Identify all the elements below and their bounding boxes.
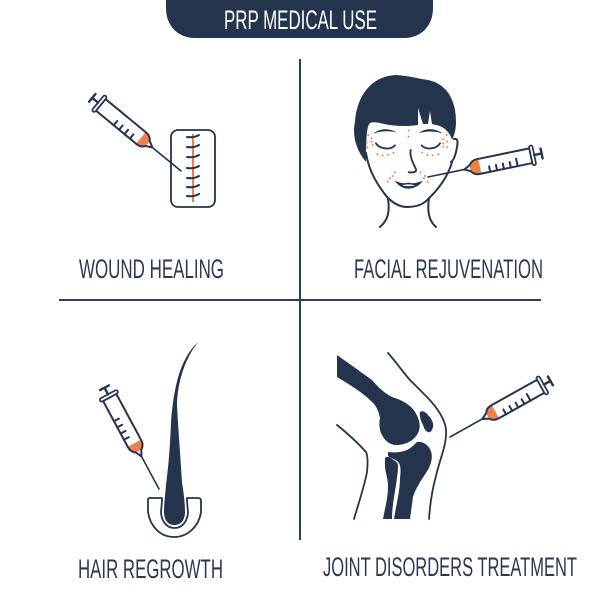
icon: syringe xyxy=(86,90,187,179)
panel: hair regrowth xyxy=(78,342,223,584)
icon: knee joint xyxy=(337,353,446,519)
title: PRP MEDICAL USE xyxy=(224,5,377,35)
quadrant divider lines xyxy=(59,59,541,540)
facial features xyxy=(366,129,448,189)
icon: syringe xyxy=(96,383,168,494)
icon: hair follicle xyxy=(148,342,201,537)
injection point dots xyxy=(366,130,448,183)
panel: wound healing xyxy=(79,90,224,284)
label: wound healing: WOUND HEALING xyxy=(79,254,224,284)
label: hair regrowth: HAIR REGROWTH xyxy=(78,554,223,584)
icon: face xyxy=(354,75,458,227)
header banner xyxy=(166,0,433,38)
icon: syringe xyxy=(426,144,544,187)
icon: wound with stitches xyxy=(171,130,215,207)
panel: facial rejuvenation xyxy=(354,75,544,284)
icon: syringe xyxy=(445,372,555,446)
panel: joint disorders treatment xyxy=(323,353,577,582)
